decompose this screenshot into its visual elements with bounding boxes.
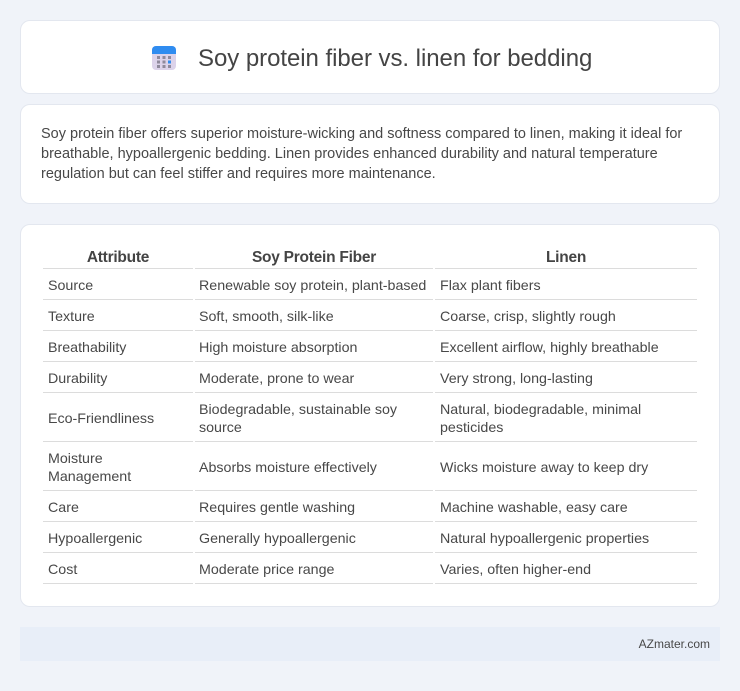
row: care: Care bbox=[48, 500, 79, 516]
title: Soy protein fiber vs. linen for bedding bbox=[198, 45, 592, 72]
intro text: Soy protein fiber offers superior moisture-wicking and softness compared to linen, making it ideal for bbox=[41, 126, 682, 142]
row: hypoallergenic bbox=[48, 531, 649, 547]
footer bar bbox=[20, 627, 720, 661]
row: eco-friendliness: source bbox=[199, 420, 242, 436]
row: hypoallergenic: Generally hypoallergenic bbox=[199, 531, 356, 547]
row: eco-friendliness: Eco-Friendliness bbox=[48, 411, 154, 427]
row: cost: Cost bbox=[48, 562, 77, 578]
row: breathability bbox=[48, 340, 659, 356]
icon: calendar bbox=[152, 46, 176, 70]
intro card bbox=[20, 104, 720, 204]
row: cost: Moderate price range bbox=[199, 562, 334, 578]
table card bbox=[20, 224, 720, 607]
footer credit: AZmater.com bbox=[639, 637, 710, 651]
row: source bbox=[48, 278, 541, 294]
row: eco-friendliness: Natural, biodegradable, minimal bbox=[440, 402, 641, 418]
row: texture: Soft, smooth, silk-like bbox=[199, 309, 334, 325]
row: moisture management bbox=[48, 451, 648, 485]
title card bbox=[20, 20, 720, 94]
row: texture: Texture bbox=[48, 309, 95, 325]
row: source: Renewable soy protein, plant-based bbox=[199, 278, 426, 294]
column headers: Attribute bbox=[87, 249, 149, 266]
row: eco-friendliness: Biodegradable, sustainable soy bbox=[199, 402, 397, 418]
row: hypoallergenic: Hypoallergenic bbox=[48, 531, 142, 547]
row: moisture management: Management bbox=[48, 469, 131, 485]
row: breathability: High moisture absorption bbox=[199, 340, 357, 356]
row: texture bbox=[48, 309, 616, 325]
row: source: Source bbox=[48, 278, 93, 294]
row: care: Requires gentle washing bbox=[199, 500, 355, 516]
column headers bbox=[87, 249, 586, 266]
row: source: Flax plant fibers bbox=[440, 278, 541, 294]
row: durability: Very strong, long-lasting bbox=[440, 371, 593, 387]
row: cost bbox=[48, 562, 591, 578]
intro text: regulation but can feel stiffer and requires more maintenance. bbox=[41, 166, 436, 182]
row: durability: Moderate, prone to wear bbox=[199, 371, 354, 387]
row: texture: Coarse, crisp, slightly rough bbox=[440, 309, 616, 325]
row: eco-friendliness bbox=[48, 402, 641, 436]
column headers: Soy Protein Fiber bbox=[252, 249, 376, 266]
row: care bbox=[48, 500, 628, 516]
row: moisture management: Absorbs moisture effectively bbox=[199, 460, 377, 476]
column headers: Linen bbox=[546, 249, 586, 266]
row: cost: Varies, often higher-end bbox=[440, 562, 591, 578]
row: eco-friendliness: pesticides bbox=[440, 420, 503, 436]
row: durability bbox=[48, 371, 593, 387]
row: moisture management: Wicks moisture away to keep dry bbox=[440, 460, 648, 476]
row: breathability: Excellent airflow, highly breathable bbox=[440, 340, 659, 356]
row: durability: Durability bbox=[48, 371, 107, 387]
row: care: Machine washable, easy care bbox=[440, 500, 628, 516]
intro text: breathable, hypoallergenic bedding. Linen provides enhanced durability and natural temperature bbox=[41, 146, 658, 162]
intro text bbox=[41, 126, 682, 182]
row: hypoallergenic: Natural hypoallergenic properties bbox=[440, 531, 649, 547]
row: breathability: Breathability bbox=[48, 340, 126, 356]
row: moisture management: Moisture bbox=[48, 451, 103, 467]
